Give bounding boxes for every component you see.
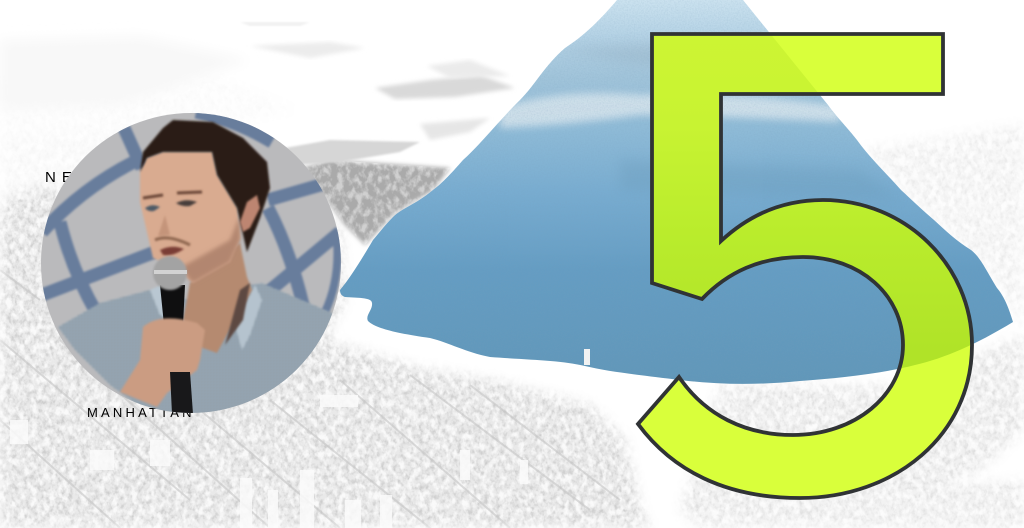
shirt: [58, 283, 342, 414]
building: tower in the water: [584, 349, 590, 365]
big numeral 5: [638, 34, 972, 498]
eyes, brows and mouth: [143, 192, 202, 255]
hand: [120, 318, 205, 407]
mountain of water: [330, 0, 1024, 390]
hair: [140, 120, 270, 252]
ear: [240, 195, 260, 232]
portrait photo: speaker with microphone: [41, 112, 342, 414]
place label: Manhattan: MANHATTAN: [87, 405, 195, 420]
dark peninsula: [305, 160, 451, 246]
face: [140, 152, 240, 283]
neck: [183, 243, 252, 353]
distant islands: [375, 75, 515, 99]
globe logo backdrop: [42, 112, 340, 312]
place label: New Jersey (hidden by portrait): NEW JERSEY: [45, 169, 203, 186]
microphone: [153, 256, 187, 325]
microphone handle: [170, 372, 193, 414]
